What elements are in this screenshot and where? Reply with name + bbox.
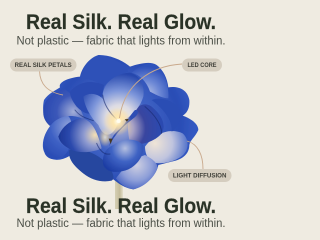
bottom petal: [116, 155, 157, 189]
lower right petal: [145, 131, 188, 163]
leader line: light diffusion: [187, 141, 203, 169]
left mid petal: [58, 118, 102, 152]
silk flower: [43, 55, 198, 189]
right mid petal: [128, 104, 164, 145]
label: led core: LED CORE: [188, 63, 216, 69]
leader line: led core: [120, 64, 182, 118]
left outer petal: [43, 114, 72, 159]
led core: [117, 119, 121, 123]
back petals: [43, 55, 198, 189]
bottom subtitle: Not plastic — fabric that lights from within.: [16, 218, 226, 230]
top right petal: [132, 64, 168, 98]
background: [0, 0, 240, 240]
petal shadow lines: [75, 95, 162, 154]
lower warm glow: [98, 128, 112, 147]
label: light diffusion: [168, 169, 232, 182]
top petal: [80, 56, 128, 87]
upper left outer petal: [43, 89, 85, 126]
warm glow: [103, 108, 131, 136]
stamen marks: [109, 119, 129, 144]
label: led core: [182, 58, 222, 72]
upper left inner petal: [70, 82, 104, 114]
center bottom petal: [103, 140, 144, 172]
inner left petal: [83, 94, 117, 135]
center ruffle: [109, 110, 138, 147]
flower stem: [115, 180, 123, 209]
leader line: real silk petals: [40, 71, 63, 95]
bottom title: Real Silk. Real Glow.: [26, 195, 216, 218]
label: real silk petals: [10, 58, 76, 72]
top title: Real Silk. Real Glow.: [26, 11, 216, 34]
top subtitle: Not plastic — fabric that lights from within.: [16, 36, 226, 48]
right petal: [152, 99, 183, 132]
center back petal: [103, 73, 144, 122]
label: real silk petals: REAL SILK PETALS: [15, 63, 72, 69]
label: light diffusion: LIGHT DIFFUSION: [173, 174, 226, 180]
lower left petal: [69, 149, 113, 181]
